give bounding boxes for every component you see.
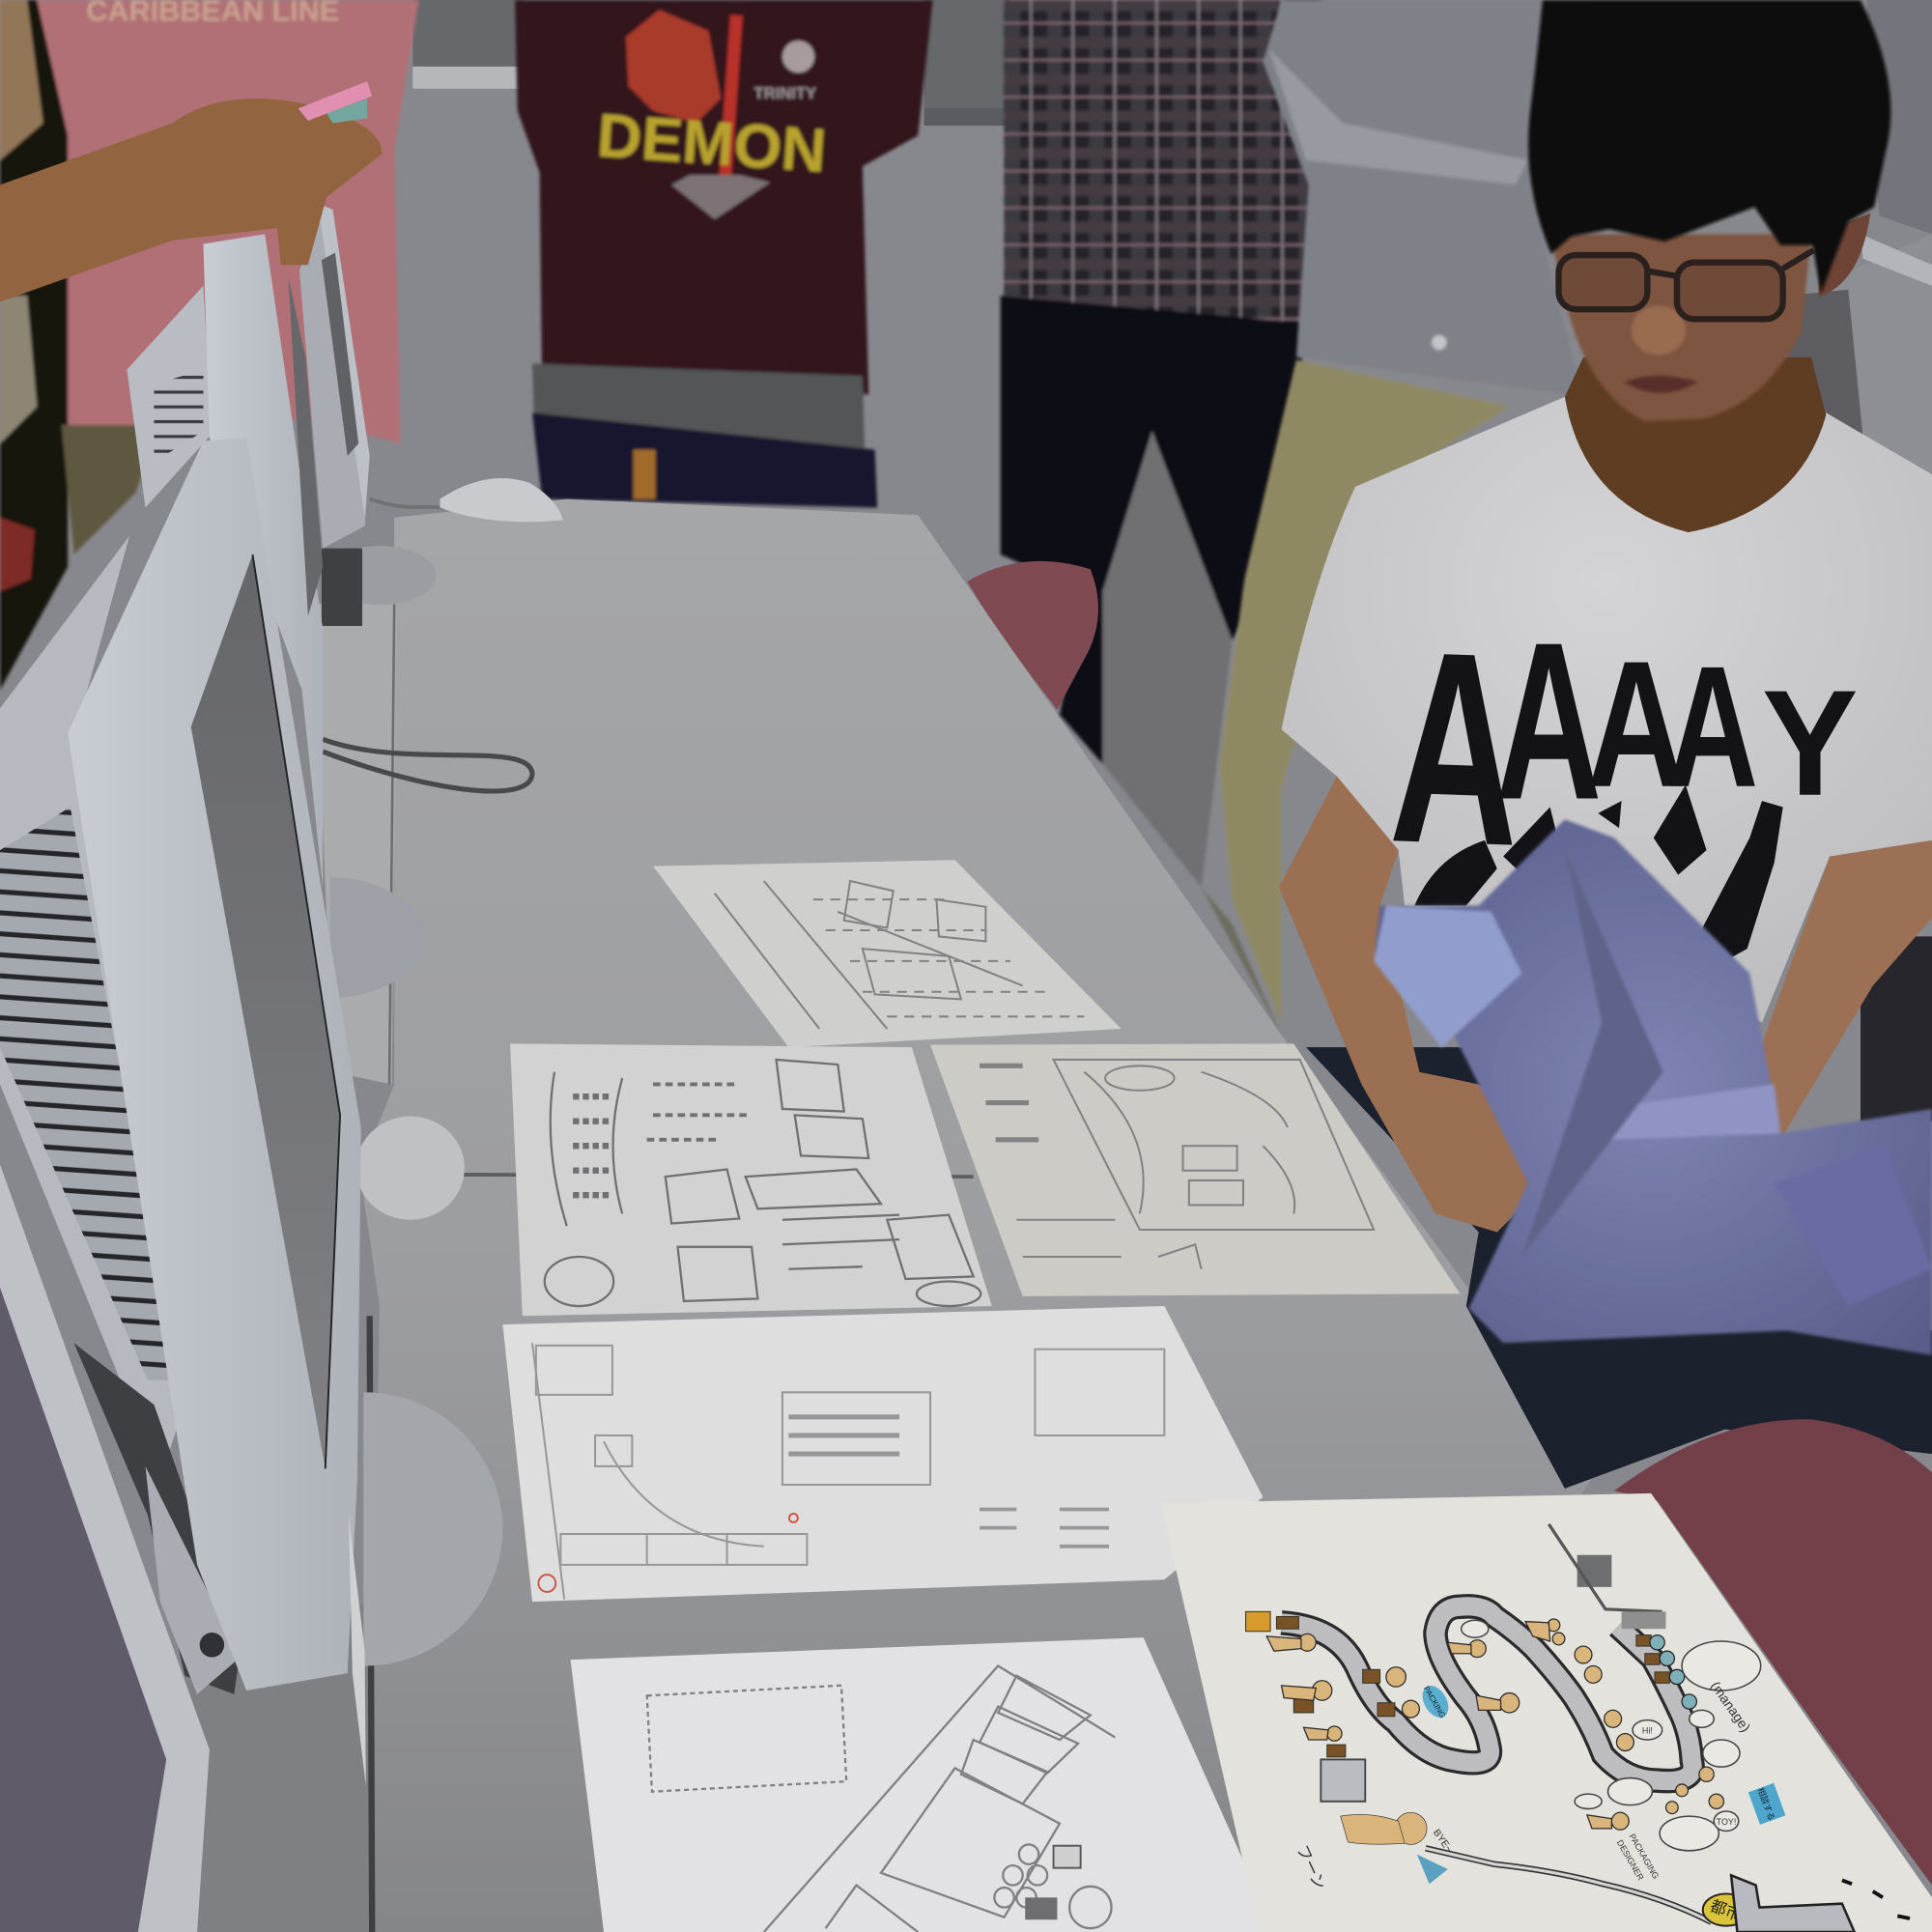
- left arm and hand: [1279, 777, 1565, 1233]
- figures: [1266, 1619, 1723, 1844]
- handwritten labels: DESIGNER: [1615, 1838, 1646, 1883]
- handwritten labels: PACKAGING: [1627, 1833, 1661, 1881]
- sweatshirt logo: demon: TRINITY: [754, 84, 816, 102]
- monitor middle: [127, 234, 425, 998]
- label: consult: 相談する: [1756, 1786, 1777, 1822]
- handwritten labels: TOY!: [1717, 1817, 1736, 1827]
- workers' heads: [1650, 1635, 1696, 1709]
- sweatshirt logo: demon: DEMON: [595, 100, 829, 185]
- face: [1550, 234, 1811, 421]
- mouse front: [356, 1117, 465, 1220]
- ear: [1819, 213, 1870, 297]
- t-shirt print: [1386, 594, 1858, 961]
- t-shirt print: A: [1587, 624, 1686, 825]
- handwritten labels: [1293, 1678, 1753, 1892]
- pill: packing: [1417, 1681, 1454, 1722]
- paper sketch 6: coloured customer journey: [1161, 1493, 1932, 1932]
- pill: packing: PACKING: [1422, 1685, 1448, 1719]
- denim shirt bundle: [1374, 819, 1932, 1355]
- cable: [323, 739, 532, 791]
- monitor rear: [299, 203, 437, 626]
- person: plaid shirt and dark trousers: [1001, 0, 1322, 1035]
- person: grey jacket and khaki trousers: [1220, 0, 1589, 1023]
- handwritten labels: BYE~: [1431, 1828, 1454, 1855]
- hand holding phone: [0, 81, 382, 301]
- glasses: [1559, 250, 1814, 319]
- t-shirt print: A: [1495, 597, 1602, 847]
- paper sketch 4: [502, 1306, 1263, 1602]
- monitor bottom left: [0, 1164, 210, 1932]
- city: [1703, 1875, 1910, 1932]
- right arm: [1749, 840, 1932, 1140]
- chair rear: [967, 561, 1098, 710]
- handwritten labels: フーン: [1293, 1842, 1329, 1892]
- handwritten labels: Hi!: [1642, 1726, 1653, 1736]
- neck: [1565, 357, 1826, 532]
- person: maroon demon sweatshirt: [515, 0, 933, 508]
- chair front: [1614, 1419, 1932, 1886]
- city: 都市: [1708, 1896, 1745, 1924]
- t-shirt print: A: [1386, 594, 1525, 904]
- paper sketch 1: [653, 860, 1122, 1047]
- paper sketch 2: [510, 1043, 992, 1316]
- table top: [185, 499, 1600, 1932]
- t-shirt print: Y: [1762, 659, 1858, 827]
- conveyor road: [1282, 1606, 1712, 1922]
- monitor front: [0, 438, 502, 1786]
- mouse rear: [370, 478, 563, 522]
- label: consult: [1748, 1783, 1785, 1825]
- person left: pink t-shirt: [0, 0, 419, 690]
- paper sketch 3: [930, 1043, 1460, 1296]
- paper sketch 5: [571, 1637, 1275, 1932]
- t-shirt: [1282, 397, 1932, 1023]
- sweatshirt logo: demon: [595, 10, 829, 219]
- boxes: [1246, 1611, 1669, 1757]
- handwritten labels: (manage): [1708, 1678, 1753, 1735]
- dark trousers of seated person: [1306, 1047, 1932, 1489]
- nose and lips: [1624, 305, 1698, 393]
- machines: [1321, 1524, 1665, 1802]
- speech bubbles: [1462, 1620, 1761, 1851]
- hair: [1528, 0, 1890, 294]
- seated student: [1279, 0, 1932, 1355]
- t-shirt print: A: [1667, 630, 1758, 823]
